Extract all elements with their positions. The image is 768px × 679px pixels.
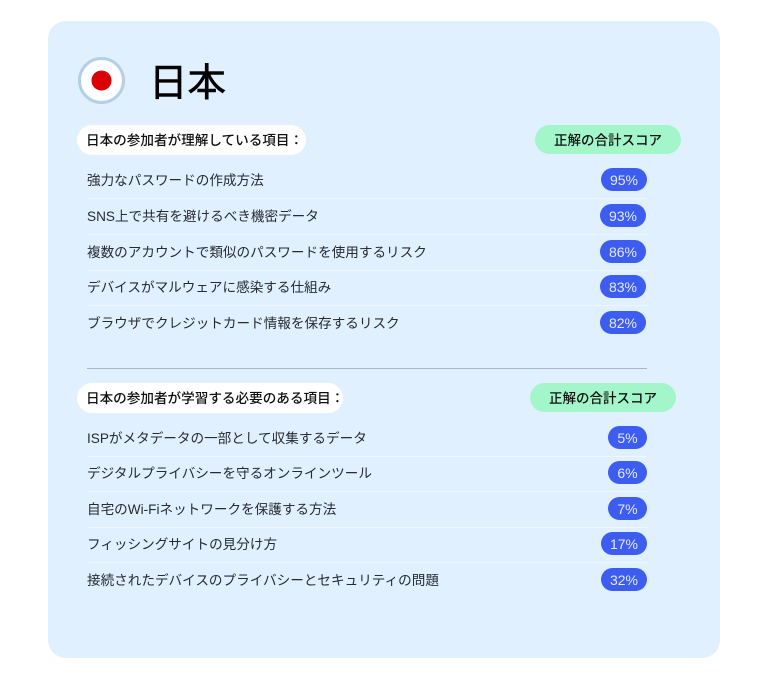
row: home Wi-Fi: 自宅のWi-Fiネットワークを保護する方法 xyxy=(87,502,336,517)
row: ISP metadata xyxy=(87,426,647,457)
row: privacy tools: デジタルプライバシーを守るオンラインツール xyxy=(87,466,372,481)
row: connected devices: 接続されたデバイスのプライバシーとセキュリティの問題 xyxy=(87,573,439,588)
row: SNS data xyxy=(87,204,647,235)
row: similar passwords xyxy=(87,240,647,271)
row: strong passwords xyxy=(87,168,647,199)
row: malware xyxy=(87,275,647,306)
row: SNS data: 93% xyxy=(609,208,637,224)
row: connected devices xyxy=(87,568,647,591)
row: ISP metadata: 5% xyxy=(617,430,638,446)
row: connected devices: 32% xyxy=(610,572,638,588)
title: 日本 xyxy=(149,62,226,105)
heading: understood items xyxy=(77,125,306,155)
row: malware: 83% xyxy=(609,279,637,295)
row: malware: デバイスがマルウェアに感染する仕組み xyxy=(87,280,331,295)
icon: Japanese flag xyxy=(78,57,125,104)
row: home Wi-Fi: 7% xyxy=(617,501,638,517)
heading: items to learn xyxy=(77,383,343,413)
row: phishing xyxy=(87,532,647,563)
row: similar passwords: 86% xyxy=(609,244,637,260)
heading: understood items: 日本の参加者が理解している項目： xyxy=(86,133,303,148)
heading: items to learn: 日本の参加者が学習する必要のある項目： xyxy=(86,391,344,406)
score header: items to learn xyxy=(530,383,676,412)
row: SNS data: SNS上で共有を避けるべき機密データ xyxy=(87,209,319,224)
row: phishing: フィッシングサイトの見分け方 xyxy=(87,537,277,552)
row: similar passwords: 複数のアカウントで類似のパスワードを使用するリスク xyxy=(87,245,427,260)
row: browser card info: 82% xyxy=(609,315,637,331)
row: home Wi-Fi xyxy=(87,497,647,528)
row: privacy tools: 6% xyxy=(617,465,638,481)
row: phishing: 17% xyxy=(610,536,638,552)
score header: understood items xyxy=(535,125,681,154)
row: strong passwords: 強力なパスワードの作成方法 xyxy=(87,173,264,188)
row: strong passwords: 95% xyxy=(610,172,638,188)
row: browser card info: ブラウザでクレジットカード情報を保存するリスク xyxy=(87,316,400,331)
row: browser card info xyxy=(87,311,646,334)
score header: understood items: 正解の合計スコア xyxy=(554,133,662,148)
score header: items to learn: 正解の合計スコア xyxy=(549,391,657,406)
row: ISP metadata: ISPがメタデータの一部として収集するデータ xyxy=(87,431,367,446)
row: privacy tools xyxy=(87,461,647,492)
